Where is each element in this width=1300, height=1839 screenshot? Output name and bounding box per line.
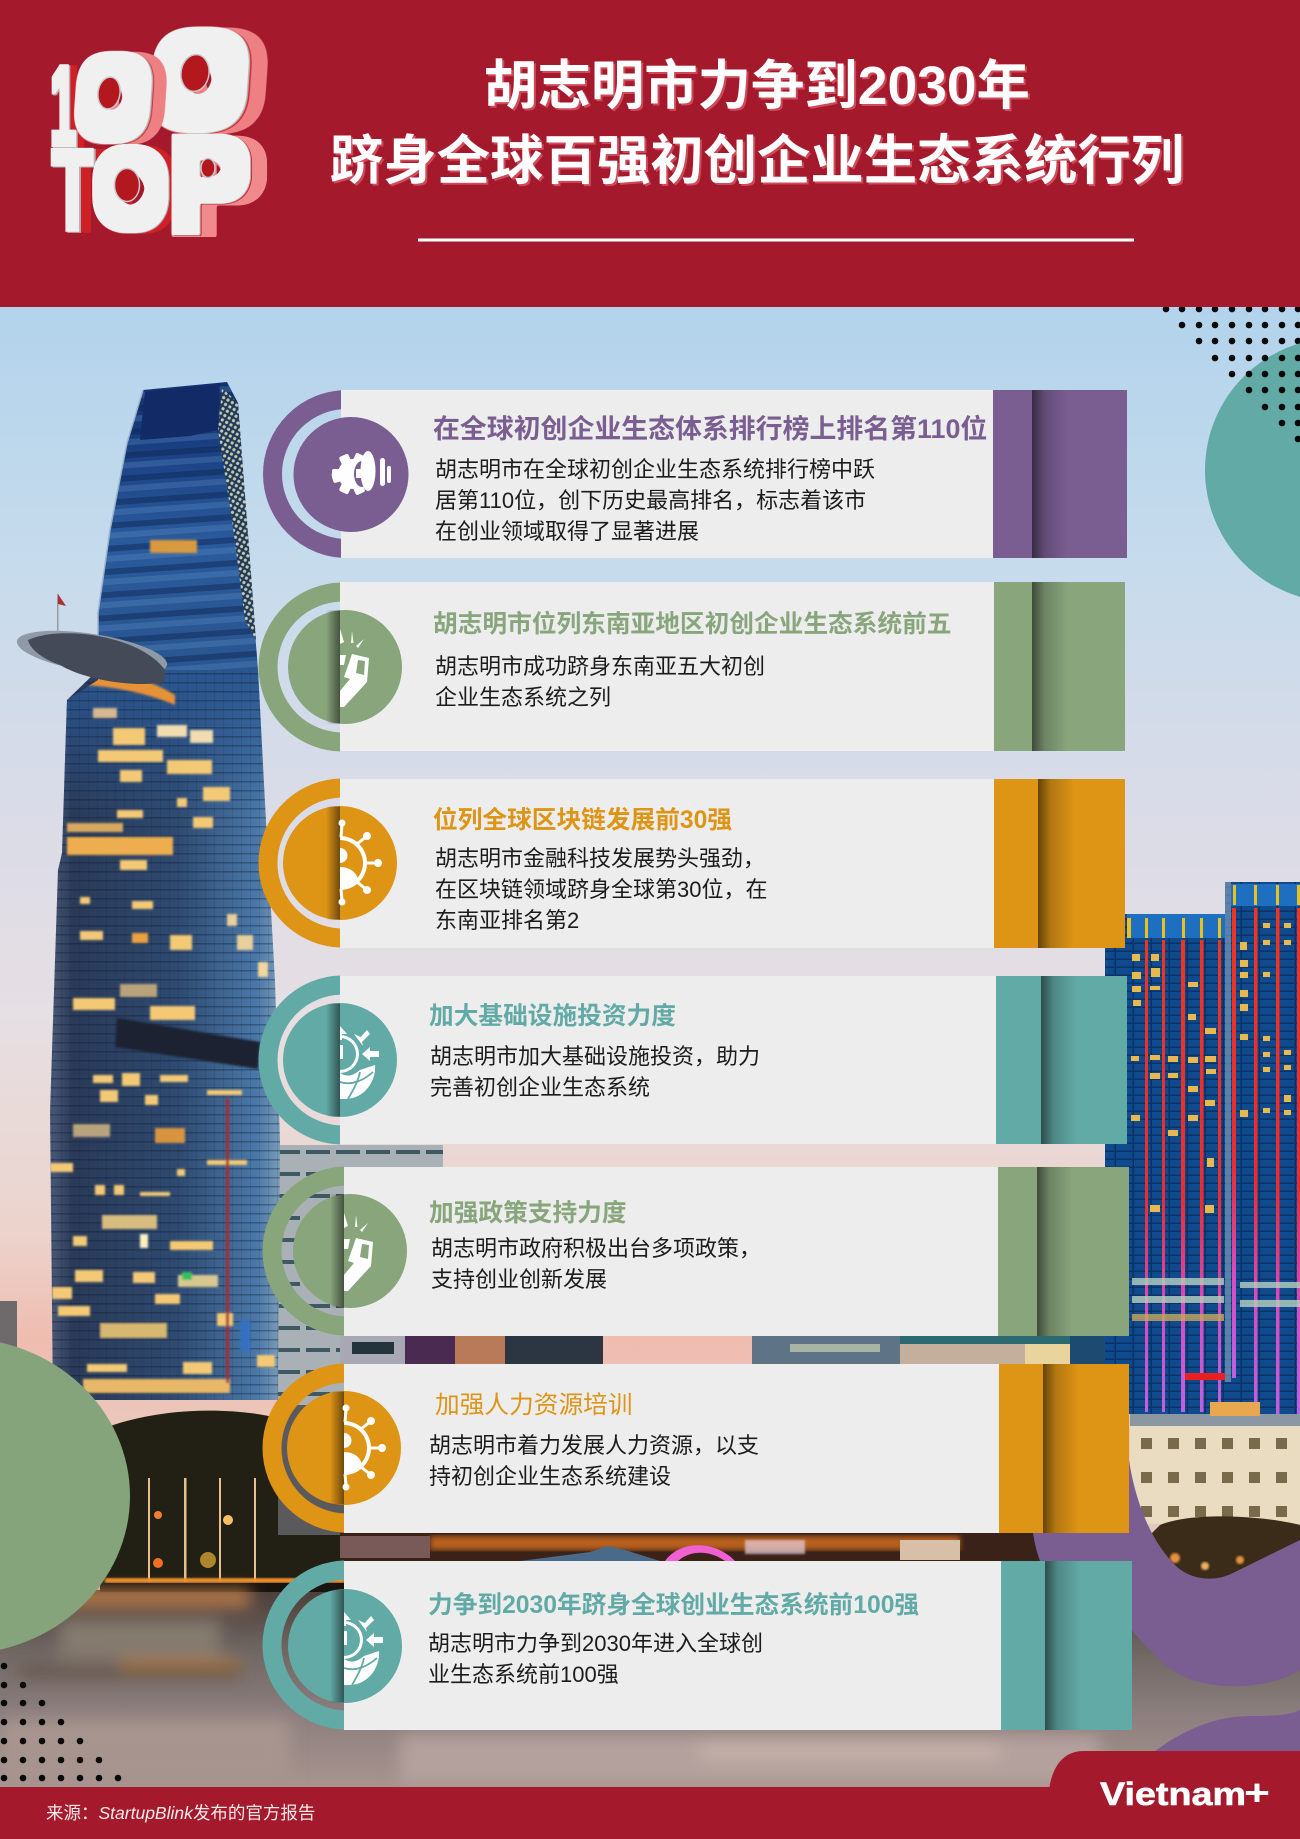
decorative dots bottom left [1, 1663, 121, 1781]
body 3: 东南亚排名第2 [435, 908, 579, 933]
body 3: 在区块链领域跻身全球第30位，在 [435, 877, 767, 902]
body 5: 支持创业创新发展 [431, 1267, 607, 1292]
title [330, 57, 1184, 191]
river reflections [0, 1590, 1100, 1785]
card 4 side band [996, 976, 1127, 1144]
card 2 side band [994, 582, 1125, 751]
icon: shield [293, 1194, 407, 1308]
icon: shield [288, 610, 402, 724]
ring 6 [262, 1364, 344, 1532]
heading 7: 力争到2030年跻身全球创业生态系统前100强 [428, 1591, 919, 1619]
card 1 body [341, 390, 994, 558]
heading 6: 加强人力资源培训 [435, 1391, 633, 1419]
body 4: 完善初创企业生态系统 [430, 1075, 650, 1100]
card 5 body [344, 1167, 998, 1336]
decorative dots over teal circle [1212, 355, 1300, 442]
card 3 side band [994, 779, 1125, 948]
icon: 3D 100 TOP logo: O [93, 132, 168, 247]
body 2: 胡志明市成功跻身东南亚五大初创 [435, 654, 765, 679]
icon: virus network [283, 806, 397, 920]
title: 跻身全球百强初创企业生态系统行列 [330, 132, 1184, 191]
icon: 3D 100 TOP logo: P [169, 112, 249, 257]
body 1: 胡志明市在全球初创企业生态系统排行榜中跃 [435, 457, 875, 482]
ring 2 [258, 582, 340, 752]
source note: 来源：StartupBlink发布的官方报告 [46, 1803, 315, 1823]
icon: globe [283, 1003, 397, 1117]
body 7: 业生态系统前100强 [428, 1662, 619, 1687]
panel: card 1 global rank 110 [272, 390, 1127, 558]
small building at far left [0, 1301, 17, 1351]
logo holes [96, 53, 211, 110]
panel: card 7 global top 100 goal [272, 1561, 1132, 1730]
body 2: 企业生态系统之列 [435, 685, 611, 710]
body 6 [429, 1433, 759, 1489]
title underline [418, 238, 1134, 242]
title: 胡志明市力争到2030年 [484, 57, 1030, 116]
card 6 side band [999, 1364, 1129, 1533]
body 4: 胡志明市加大基础设施投资，助力 [430, 1044, 760, 1069]
card 2 body [340, 582, 994, 751]
decorative dots top right [1163, 306, 1300, 344]
card 6 body [344, 1364, 999, 1533]
header band [0, 0, 1300, 307]
Vietnam+ logo: + [1244, 1772, 1270, 1813]
body 1 [435, 457, 875, 544]
decorative purple blob [1033, 1460, 1300, 1760]
heading 2: 胡志明市位列东南亚地区初创企业生态系统前五 [433, 609, 951, 638]
icon: globe [288, 1589, 402, 1703]
panel: card 2 Southeast Asia top five [268, 582, 1125, 751]
body 5 [431, 1236, 761, 1292]
body 2 [435, 654, 765, 710]
card 1 side band [993, 390, 1127, 558]
colonial hotel and trees [1130, 1402, 1300, 1590]
icon: 3D 100 TOP logo: 0 [69, 43, 156, 153]
decorative green circle [0, 1338, 130, 1654]
icon: virus network [287, 1391, 401, 1505]
body 5: 胡志明市政府积极出台多项政策， [431, 1236, 761, 1261]
body 7: 胡志明市力争到2030年进入全球创 [428, 1631, 763, 1656]
heading 3: 位列全球区块链发展前30强 [433, 805, 732, 834]
ring 4 [258, 976, 340, 1144]
Bitexco tower [14, 382, 280, 1400]
icon: gear and signal bars [294, 417, 408, 532]
body 1: 居第110位，创下历史最高排名，标志着该市 [435, 488, 866, 513]
card 4 body [340, 976, 996, 1144]
riverside trees and lights [100, 1405, 1040, 1592]
body 6: 胡志明市着力发展人力资源，以支 [429, 1433, 759, 1458]
body 6: 持初创企业生态系统建设 [429, 1464, 671, 1489]
decorative teal circle [1205, 338, 1300, 602]
heading 5: 加强政策支持力度 [429, 1199, 627, 1227]
footer band [0, 1751, 1300, 1839]
ring 3 [258, 778, 340, 948]
grey office building beside tower [278, 1145, 1130, 1405]
ring 1 [263, 390, 341, 558]
card 5 side band [998, 1167, 1129, 1336]
panel: card 5 policy support [272, 1167, 1129, 1336]
icon: 3D 100 TOP logo: T [52, 126, 92, 253]
panel: card 4 infrastructure [268, 976, 1127, 1144]
ring 5 [262, 1166, 344, 1336]
panel: card 6 human resources [272, 1364, 1129, 1533]
logo holes lower [114, 158, 215, 202]
panel: card 3 blockchain top 30 [268, 779, 1125, 948]
icon: 3D 100 TOP logo: 0 [144, 16, 255, 144]
Vietnam+ logo [1100, 1772, 1270, 1813]
heading 1: 在全球初创企业生态体系排行榜上排名第110位 [433, 413, 987, 444]
lit windows [50, 540, 275, 1393]
body 3 [435, 846, 767, 933]
heading 4: 加大基础设施投资力度 [429, 1002, 676, 1030]
right high-rise towers [1105, 882, 1300, 1418]
body 7 [428, 1631, 763, 1687]
card 3 body [340, 779, 994, 948]
icon: 3D 100 TOP logo [50, 16, 255, 257]
helipad [14, 594, 170, 684]
card 7 side band [1001, 1561, 1132, 1730]
body 4 [430, 1044, 760, 1100]
card 7 body [344, 1561, 1001, 1730]
body 1: 在创业领域取得了显著进展 [435, 519, 699, 544]
icon: 3D 100 TOP logo: 1 [50, 45, 76, 169]
ring 7 [262, 1560, 344, 1730]
body 3: 胡志明市金融科技发展势头强劲， [435, 846, 765, 871]
Vietnam+ logo: Vietnam [1100, 1776, 1246, 1812]
